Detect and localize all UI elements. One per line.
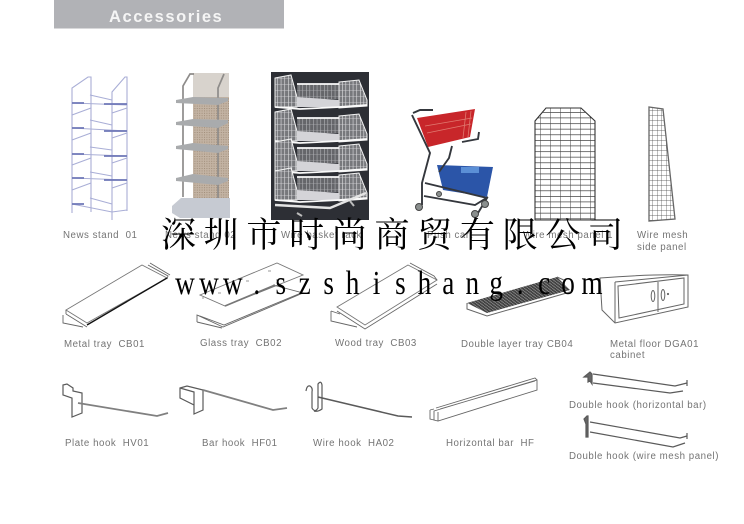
watermark: company name: 深圳市时尚商贸有限公司 xyxy=(161,216,623,255)
cabinet DGA01 xyxy=(600,275,688,323)
double hook horizontal bar xyxy=(584,372,687,393)
product labels row 3 xyxy=(65,400,719,462)
product: wire mesh side panel xyxy=(649,107,675,221)
product labels row 1: News stand 02 xyxy=(165,230,236,241)
product labels row 1: Push cart xyxy=(427,230,473,241)
product labels row 2: Metal floor DGA01 xyxy=(610,339,699,350)
product labels row 3: Bar hook HF01 xyxy=(202,438,278,449)
product labels row 2 xyxy=(64,338,699,361)
product labels row 2: Metal tray CB01 xyxy=(64,339,145,350)
tray: metal CB01 xyxy=(63,263,170,327)
horizontal bar HF xyxy=(430,378,537,421)
tray: glass CB02 xyxy=(197,263,303,328)
product labels row 1: side panel xyxy=(637,242,687,253)
title banner xyxy=(54,0,284,28)
tray: wood CB03 xyxy=(331,263,437,329)
hook: plate HV01 xyxy=(63,384,168,417)
product labels row 3: Double hook (wire mesh panel) xyxy=(569,451,719,462)
product labels row 1: Wire mesh panel 1 xyxy=(523,230,613,241)
product: wire mesh panel xyxy=(535,108,595,220)
product: push cart xyxy=(412,109,493,218)
title banner: Accessories xyxy=(109,8,223,26)
product labels row 2: Double layer tray CB04 xyxy=(461,339,573,350)
hook: wire HA02 xyxy=(306,382,412,417)
product: wire basket rack xyxy=(271,72,369,220)
product labels row 2: Wood tray CB03 xyxy=(335,338,417,349)
double hook wire mesh panel xyxy=(584,416,687,447)
product labels row 1: News stand 01 xyxy=(63,230,137,241)
product labels row 3: Horizontal bar HF xyxy=(446,438,535,449)
product labels row 1: Wire basket rack xyxy=(281,230,362,241)
product labels row 1 xyxy=(63,230,688,253)
product labels row 2: Glass tray CB02 xyxy=(200,338,282,349)
tray: double layer CB04 xyxy=(467,277,570,316)
product labels row 1: Wire mesh xyxy=(637,230,688,241)
product: news stand 02 xyxy=(172,73,230,218)
product labels row 3: Plate hook HV01 xyxy=(65,438,149,449)
product labels row 3: Wire hook HA02 xyxy=(313,438,394,449)
hook: bar HF01 xyxy=(180,386,287,414)
product: news stand 01 xyxy=(72,77,127,220)
product labels row 3: Double hook (horizontal bar) xyxy=(569,400,707,411)
product labels row 2: cabinet xyxy=(610,350,645,361)
watermark: website: www.szshishang.com xyxy=(175,264,603,302)
